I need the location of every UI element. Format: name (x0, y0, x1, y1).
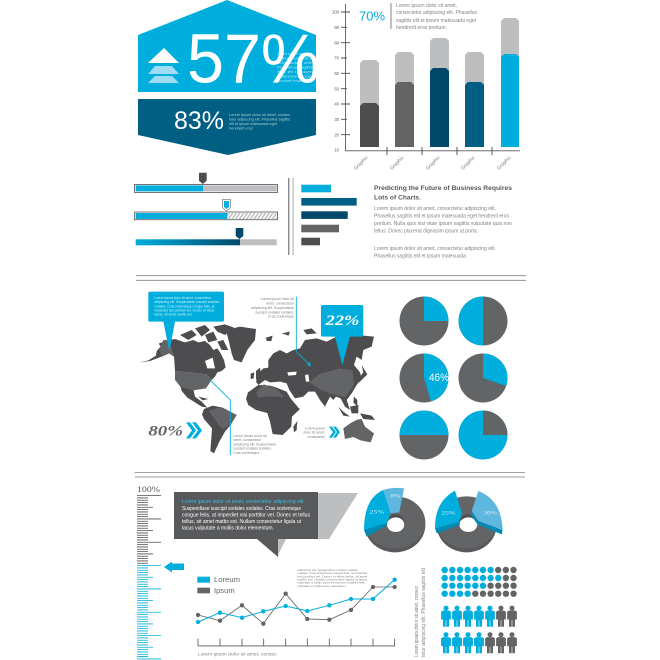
chart note text: vulputate a mollis dolor elementum sodales felis. (297, 581, 366, 585)
x axis labels (353, 155, 513, 172)
dot matrix (445, 570, 515, 594)
heading and body text: Predicting the Future of Business Requires (374, 185, 512, 192)
y axis labels: 10 (334, 148, 340, 152)
callout: 70% with text: consectetur adipiscing elit. Phasellus (396, 10, 477, 16)
callout: 22% (321, 305, 363, 365)
callout: left text box: imperdiet nisi porttitor vel. Donec et tellus (154, 308, 215, 312)
heading and body text: pretium. Nulla quis nisl vitae ipsum sagittis vulputate quis non (374, 221, 512, 227)
callout: left text box: tellus, sit amet mattis est. (154, 313, 193, 317)
callout: 70% with text: sagittis elit et ipsum malesuada eget (396, 18, 477, 24)
y axis labels: 50 (334, 86, 340, 91)
y axis labels (332, 10, 340, 152)
progress bar 1 (134, 173, 278, 192)
pointer line: USA to bottom text: amet, consectetur (233, 438, 262, 442)
donut chart left (364, 488, 425, 552)
note with chevrons by Australia (303, 426, 340, 439)
callout: left text box (148, 292, 224, 352)
pointer line: top text to Russia: adipiscing elit. Suspendisse (251, 306, 294, 310)
pie 1 (400, 296, 448, 346)
blue ticks (142, 565, 157, 660)
callout: 70% with text (359, 3, 477, 31)
small text in dark hexagon: elit et ipsum malesuada eget (229, 122, 277, 126)
y axis labels: 30 (334, 117, 340, 122)
x axis labels: Graphic (425, 155, 442, 172)
100% ruler scale (137, 485, 184, 660)
note with chevrons by Australia: Lorem ipsum (305, 426, 325, 430)
icon: stacked up arrows (148, 48, 179, 83)
donut labels: 30% (483, 510, 498, 516)
speech box text: Suspendisse suscipit sodales sodales. Cras scelerisque (182, 506, 301, 512)
stat: 80% with chevrons (148, 422, 202, 440)
chart axes and tick marks (341, 4, 520, 155)
progress bars (134, 173, 278, 245)
big number 57%: 57% (187, 20, 320, 98)
horizontal bars (301, 185, 357, 245)
donut labels: 25% (441, 510, 456, 516)
callout: left text box: adipiscing elit. Suspendisse suscipit sodales (154, 300, 220, 304)
pie 3 with 46% (400, 353, 449, 402)
chart note text: vulputate a mollis dolor elementum. (297, 584, 347, 588)
callout: left text box: sodales. Cras scelerisque congue felis, at (154, 304, 214, 308)
chart note text: adipiscing elit. Suspendisse suscipit sodales (297, 568, 359, 572)
segment 25% (364, 490, 391, 530)
section divider lines (134, 276, 526, 477)
pie charts (400, 296, 508, 460)
heading and body text: Lots of Charts. (374, 194, 421, 202)
x axis (198, 639, 395, 646)
chart note text: sodales. Cras scelerisque congue felis, at imperdiet (297, 571, 368, 575)
panel: blue hexagon top with 57% (138, 0, 320, 98)
pie 5 (400, 410, 448, 460)
vertical caption (414, 567, 427, 657)
legend: Loreum (214, 575, 240, 584)
speech box text: congue felis, at imperdiet nisi porttitor vel. Donec et tellus (182, 512, 311, 518)
callout: 70% with text: Lorem ipsum dolor sit amet, (396, 3, 457, 9)
x axis labels: Graphic (460, 155, 477, 172)
small text over hexagon: hendrerit eros (277, 79, 301, 83)
continents dark (139, 324, 375, 453)
pointer line: USA to bottom text (210, 380, 276, 455)
small text over hexagon: elit et ipsum (277, 70, 313, 74)
y axis labels: 20 (334, 132, 340, 137)
double vertical divider (288, 178, 294, 255)
y axis labels: 70 (334, 56, 340, 60)
heading and body text: tellus. Donec placerat dignissim ipsum at porta. (374, 228, 478, 234)
y axis labels: 90 (334, 25, 340, 30)
inland water (205, 358, 309, 382)
pie 6 (458, 410, 508, 460)
y axis labels: 40 (334, 102, 340, 106)
bar chart: stacked columns (332, 4, 520, 172)
small text in dark hexagon: hendrerit eros (229, 126, 253, 130)
pointer line: top text to Russia: Cras scelerisque (268, 315, 294, 319)
pointer line: USA to bottom text: Cras scelerisque (233, 451, 259, 455)
pie 2 (458, 296, 508, 346)
donut labels (441, 510, 498, 516)
heading and body text (374, 185, 512, 260)
pointer line: top text to Russia: amet, consectetur (266, 302, 295, 306)
chart note text: mattis est. Nullam consectetur ligula ut lacus (297, 577, 368, 581)
speech box text: tellus, sit amet mattis est. Nullam consectetur ligula ut (182, 519, 302, 525)
heading and body text: Lorem ipsum dolor sit amet, consectetur adipiscing elit. (374, 246, 496, 252)
y axis labels: 80 (334, 40, 340, 45)
heading and body text: Phasellus sagittis elit et ipsum malesuada eget hendrerit eros (374, 214, 509, 220)
series loreum (196, 577, 397, 624)
y axis labels: 100 (332, 10, 340, 14)
small text over hexagon: sit amet, consectetur (277, 56, 314, 60)
legend (197, 575, 240, 595)
callout: 70% with text: hendrerit eros pretium. (396, 25, 447, 31)
small text over hexagon: adipiscing elit. (277, 61, 313, 65)
small text over hexagon (277, 52, 314, 83)
label 100%: 100% (137, 485, 160, 494)
pointer line: top text to Russia (251, 297, 311, 366)
callout: 22%: 22% (324, 313, 359, 329)
note with chevrons by Australia: dolor sit amet, (303, 431, 325, 435)
small text in dark hexagon: Lorem ipsum dolor sit amet, consec (229, 113, 290, 117)
progress bar 2 (134, 200, 278, 220)
pie 4 (458, 353, 508, 402)
y axis labels: 60 (334, 71, 340, 76)
segment 30% (472, 491, 503, 530)
people pictogram row 2 (441, 632, 517, 653)
donut labels: 8% (390, 494, 401, 500)
progress bar 3 (136, 228, 277, 245)
small text in dark hexagon: tetur adipiscing elit. Phasellus sagittis (229, 118, 290, 122)
pointer line: USA to bottom text: Lorem ipsum dolor sit (233, 434, 267, 438)
speech box text: Lorem ipsum dolor sit amet, consectetur adipiscing elit. (182, 499, 305, 505)
pointer line: USA to bottom text: suscipit sodales sodales. (233, 447, 272, 451)
legend: Ipsum (214, 586, 235, 595)
chart note text (297, 568, 368, 588)
heading and body text: Phasellus sagittis elit et ipsum malesuada (374, 254, 466, 260)
donut labels: 25% (369, 510, 385, 516)
highlighted countries (159, 340, 374, 442)
segment 25% (435, 491, 462, 528)
pointer line: top text to Russia: suscipit sodales sodales. (255, 310, 294, 314)
line chart (196, 568, 397, 657)
vertical caption: tetur adipiscing elit. Phasellus sagittis elit (421, 567, 427, 657)
heading and body text: Lorem ipsum dolor sit amet, consectetur adipiscing elit. (374, 206, 496, 212)
x axis labels: Graphic (353, 155, 370, 172)
stat: 80% with chevrons: 80% (148, 424, 183, 440)
x axis labels: Graphic (389, 155, 406, 172)
pointer line: top text to Russia: Lorem ipsum dolor sit (261, 297, 294, 301)
axis caption: Lorem ipsum dolor sit amet, consec (198, 651, 277, 657)
series ipsum (196, 585, 397, 626)
small text over hexagon: Phasellus sagittis (277, 66, 313, 70)
small text in dark hexagon (229, 113, 290, 130)
panel: dark hexagon bottom with 83% (138, 99, 316, 155)
speech box text (182, 499, 311, 532)
x axis labels: Graphic (496, 155, 513, 172)
number 83%: 83% (174, 107, 224, 135)
small text over hexagon: Lorem ipsum dolor (277, 52, 308, 56)
arrow pointing to ruler (164, 562, 184, 572)
dark ticks (142, 495, 157, 565)
segment 8% (383, 488, 404, 513)
pie 3 with 46%: 46% (429, 372, 449, 384)
people pictogram row 1 (441, 606, 517, 627)
vertical caption: Lorem ipsum dolor sit amet, consec (414, 586, 420, 657)
speech box (174, 492, 358, 557)
speech box text: lacus vulputate a mollis dolor elementum. (182, 526, 274, 532)
callout: 70% with text: 70% (359, 8, 385, 24)
chart note text: nisi porttitor vel. Donec et tellus tellus, sit amet (297, 574, 368, 578)
donut chart right (435, 491, 503, 552)
bars (360, 18, 519, 147)
donut labels (369, 494, 401, 516)
callout: left text box: Lorem ipsum dolor sit amet, consectetur (154, 296, 212, 300)
small text over hexagon: malesuada eget (277, 74, 313, 78)
world map (139, 292, 375, 455)
pointer line: USA to bottom text: adipiscing elit. Suspendisse (233, 442, 276, 446)
note with chevrons by Australia: consectetur (307, 435, 326, 439)
